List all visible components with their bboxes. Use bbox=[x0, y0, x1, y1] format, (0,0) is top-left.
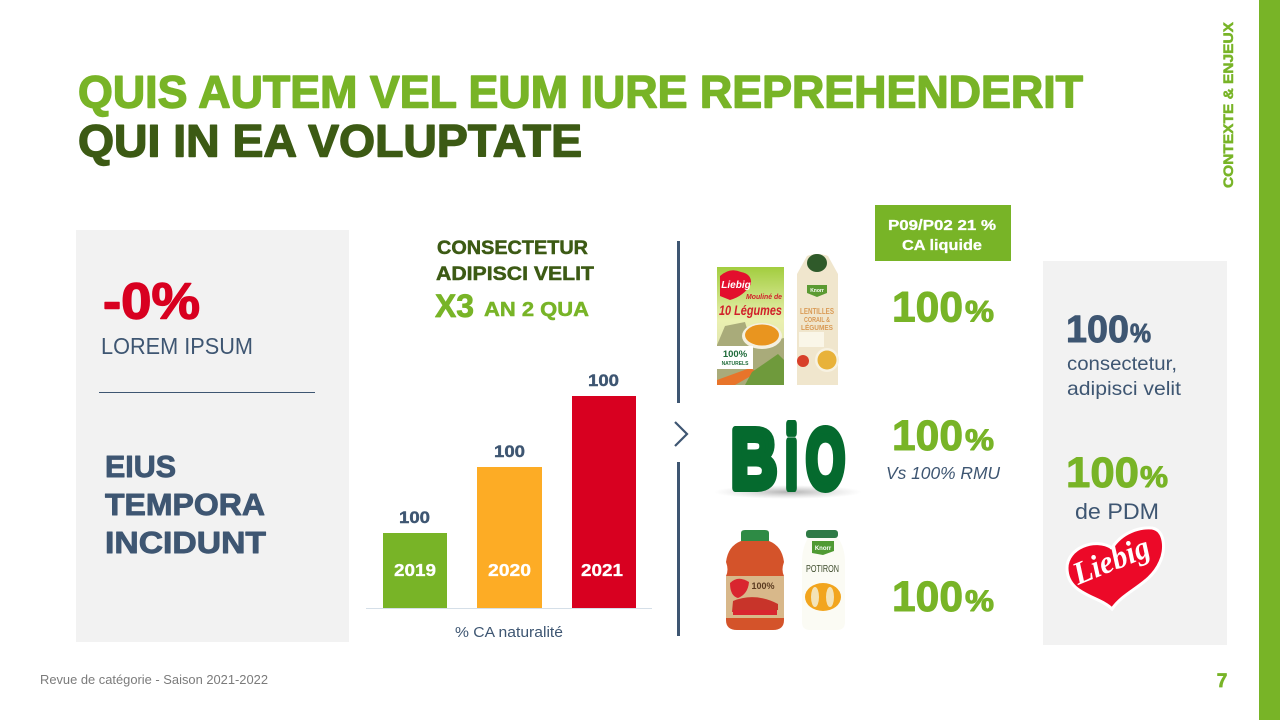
bar 2019: 100 bbox=[399, 508, 430, 527]
stat: 100% row 2: 100 bbox=[892, 412, 963, 460]
stat: de PDM bbox=[1066, 449, 1168, 524]
title: QUI IN EA VOLUPTATE bbox=[78, 116, 582, 166]
footer text: Revue de catégorie - Saison 2021-2022 bbox=[40, 673, 268, 687]
statement text: INCIDUNT bbox=[105, 525, 266, 560]
product: Knorr soup carton: Knorr bbox=[810, 288, 824, 294]
stat: 100% row 1: 100 bbox=[892, 284, 963, 332]
chart heading: AN 2 QUA bbox=[484, 299, 589, 321]
product: Knorr soup carton: LENTILLES bbox=[800, 307, 835, 316]
bar 2021 bbox=[572, 371, 636, 608]
product: Knorr pumpkin bottle: POTIRON bbox=[806, 564, 839, 575]
title bbox=[78, 66, 1083, 166]
product: Knorr pumpkin bottle: Knorr bbox=[815, 546, 832, 552]
product: Liebig soup carton: 100% bbox=[723, 349, 748, 360]
stat: de PDM: % bbox=[1140, 461, 1168, 494]
logo: BIO lettering: O bbox=[806, 412, 845, 506]
stat: de PDM: 100 bbox=[1066, 449, 1139, 497]
label: lorem ipsum: LOREM IPSUM bbox=[101, 333, 253, 359]
product: Knorr soup carton: CORAIL & bbox=[804, 315, 830, 324]
panel: left key figures bbox=[76, 230, 349, 642]
stat: 100% row 2 bbox=[886, 412, 1000, 483]
product: Liebig soup carton: 10 Légumes bbox=[719, 302, 782, 318]
bar 2020 bbox=[477, 442, 542, 608]
product: Liebig soup carton bbox=[717, 267, 784, 385]
stat: 100% row 3: 100 bbox=[892, 573, 963, 621]
page number: 7 bbox=[1217, 671, 1227, 692]
stat: consectetur: % bbox=[1130, 318, 1151, 348]
stat: consectetur: 100 bbox=[1066, 309, 1129, 351]
bar chart bbox=[366, 371, 652, 641]
bar 2021: 100 bbox=[588, 371, 619, 390]
statement text bbox=[105, 449, 266, 560]
axis caption: % CA naturalité bbox=[455, 624, 563, 641]
divider with chevron arrow bbox=[675, 241, 687, 636]
logo: Liebig heart: Liebig bbox=[1066, 528, 1155, 592]
logo: BIO lettering: i bbox=[785, 408, 798, 507]
logo: BIO lettering: B bbox=[731, 412, 777, 506]
logo: BIO lettering bbox=[714, 408, 862, 507]
chart heading bbox=[435, 238, 594, 324]
vertical section label: CONTEXTE & ENJEUX bbox=[1220, 21, 1236, 188]
stat: consectetur: consectetur, bbox=[1067, 353, 1177, 375]
bar 2019: 2019 bbox=[394, 560, 436, 580]
bar 2020: 100 bbox=[494, 442, 525, 461]
tag: P09/P02 bbox=[875, 205, 1011, 261]
stat: consectetur bbox=[1066, 309, 1182, 400]
tag: P09/P02: P09/P02 21 % bbox=[888, 217, 996, 234]
stat: 100% row 2: % bbox=[965, 424, 994, 457]
chart heading: CONSECTETUR bbox=[437, 238, 588, 259]
stat: 100% row 3: % bbox=[965, 585, 994, 618]
stat: consectetur: adipisci velit bbox=[1067, 378, 1182, 400]
product: Knorr soup carton: LÉGUMES bbox=[801, 323, 833, 332]
stat: 100% row 1: % bbox=[965, 296, 994, 328]
product: Liebig soup carton: Mouliné de bbox=[746, 292, 782, 301]
bar 2020: 2020 bbox=[488, 560, 531, 580]
product: Liebig tomato bottle: 100% bbox=[751, 581, 775, 591]
stat: 100% row 2: Vs 100% RMU bbox=[886, 463, 1000, 483]
statement text: TEMPORA bbox=[105, 487, 265, 522]
stat: de PDM: de PDM bbox=[1075, 499, 1159, 524]
product: Knorr pumpkin bottle bbox=[802, 530, 845, 630]
product: Liebig soup carton: Liebig bbox=[721, 280, 751, 291]
bar 2019 bbox=[383, 508, 447, 608]
product: Liebig soup carton: NATURELS bbox=[722, 361, 749, 367]
title: QUIS AUTEM VEL EUM IURE REPREHENDERIT bbox=[78, 66, 1083, 118]
right green sidebar bbox=[1259, 0, 1280, 720]
bar 2021: 2021 bbox=[581, 560, 623, 580]
icon: chevron bbox=[675, 422, 687, 446]
product: Knorr soup carton bbox=[797, 254, 839, 385]
chart heading: ADIPISCI VELIT bbox=[436, 264, 594, 285]
key figure: -0%: -0% bbox=[103, 272, 200, 330]
panel: right figures bbox=[1043, 261, 1227, 645]
chart heading: X3 bbox=[435, 288, 474, 324]
product: Liebig tomato bottle bbox=[726, 530, 784, 630]
tag: P09/P02: CA liquide bbox=[902, 237, 982, 254]
statement text: EIUS bbox=[105, 449, 176, 484]
